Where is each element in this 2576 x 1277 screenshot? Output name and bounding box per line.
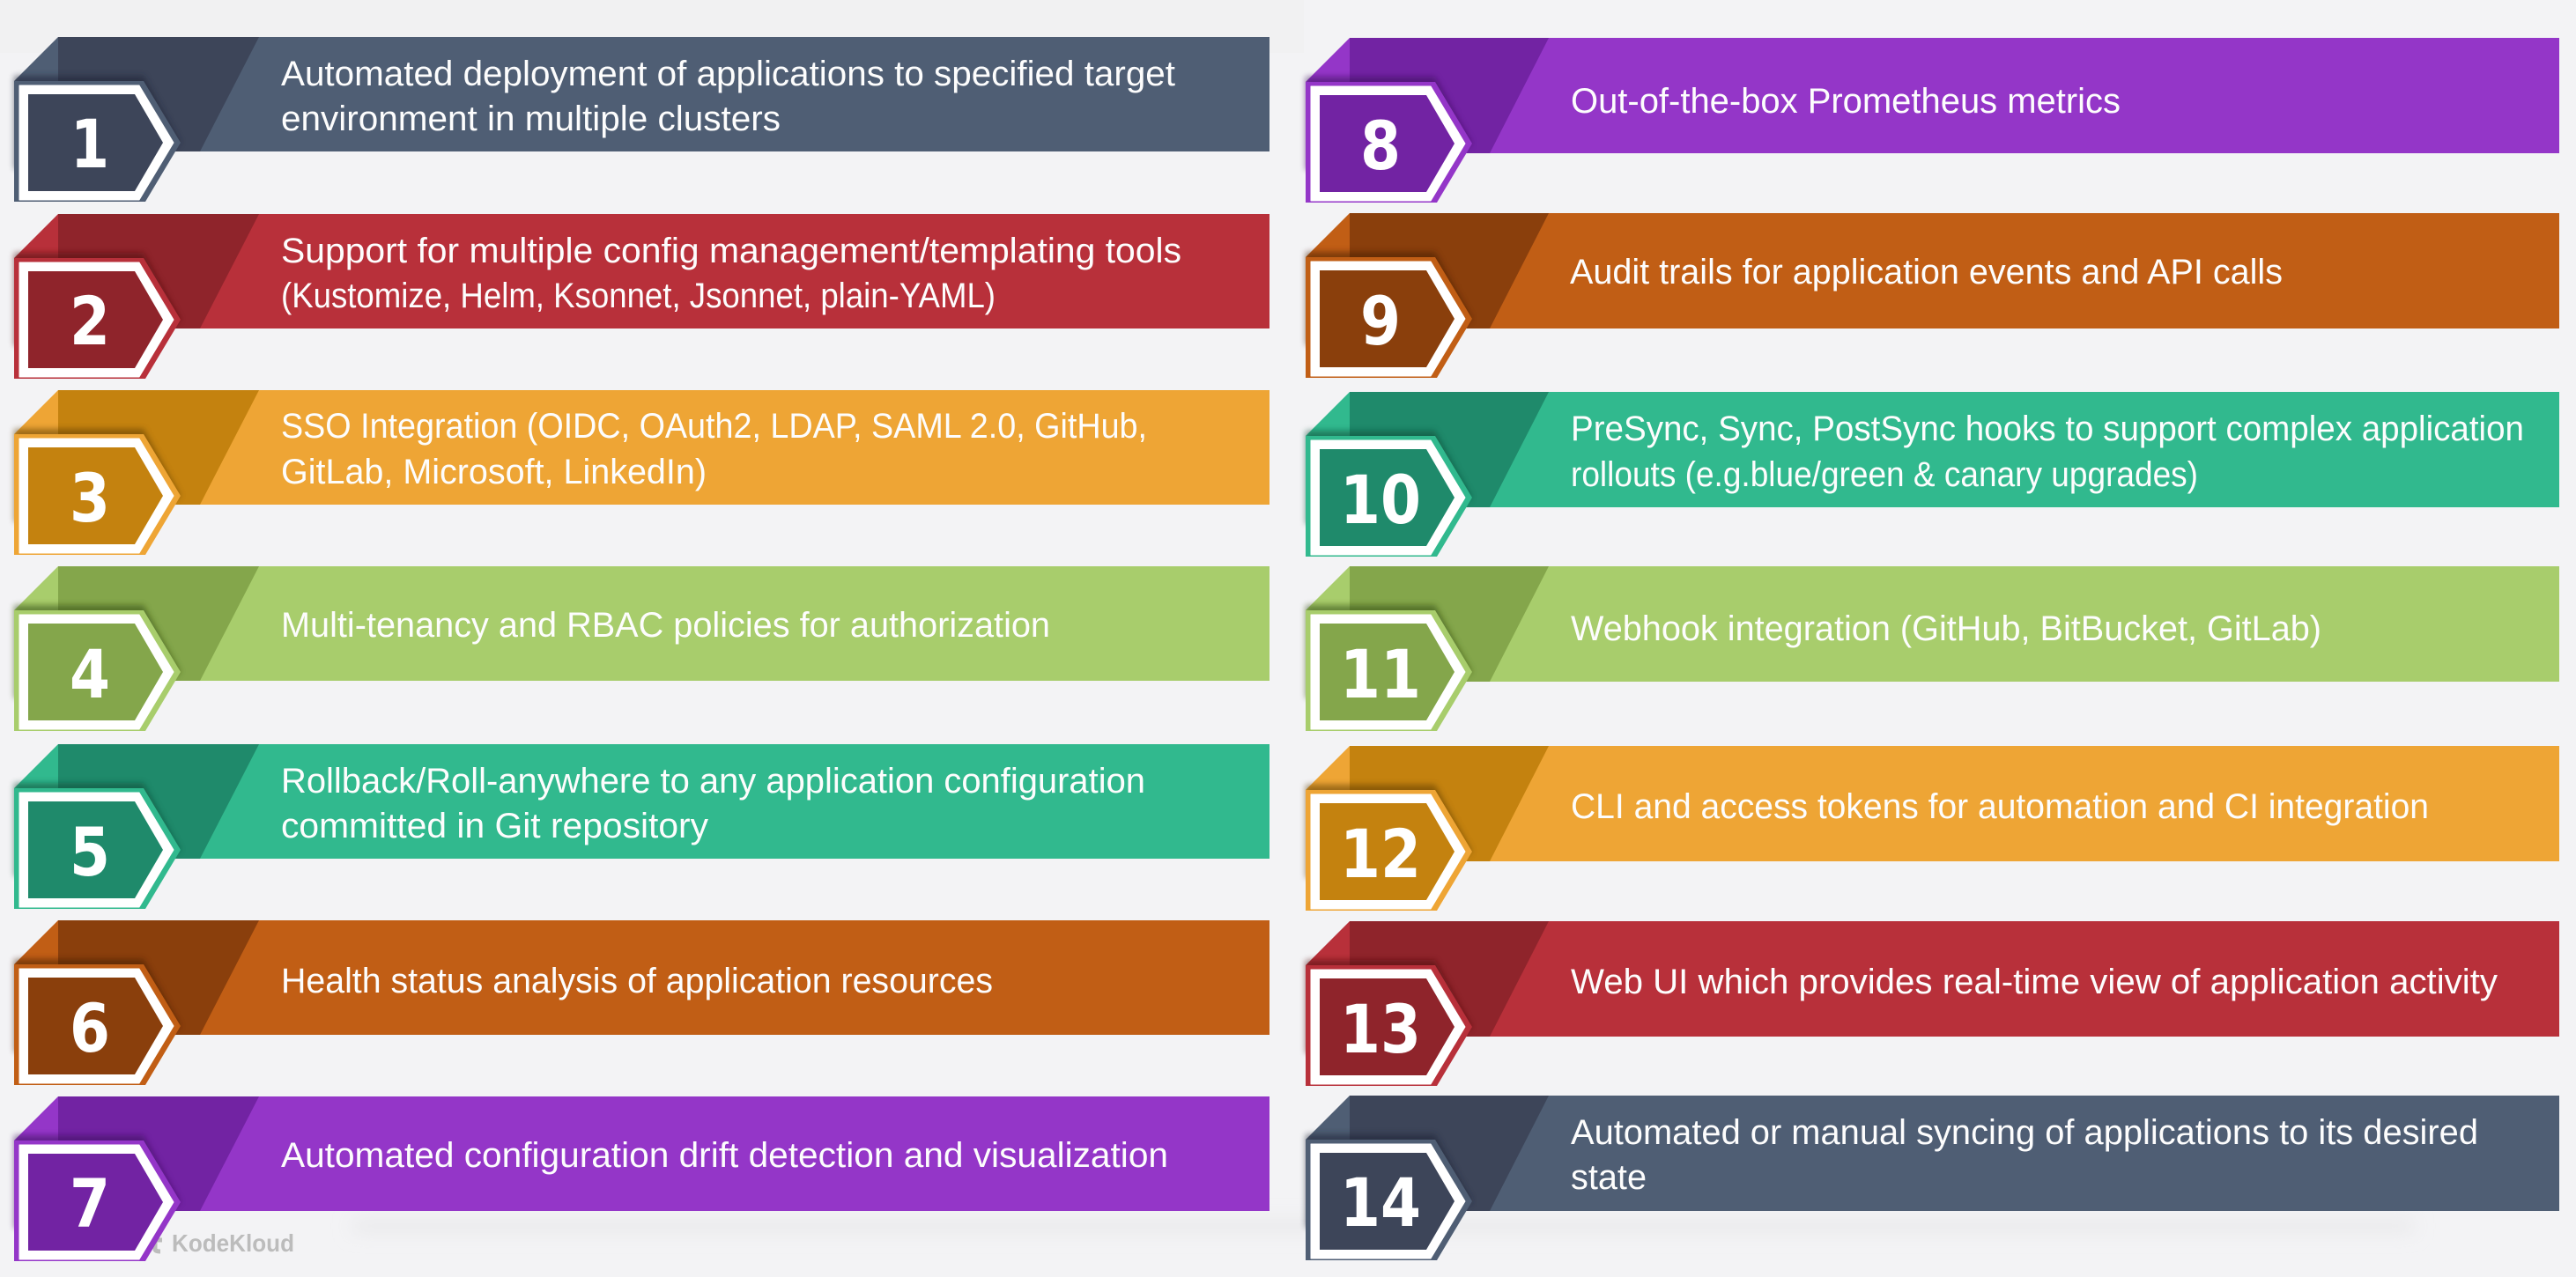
badge shadow [1306,77,1472,170]
badge: 2 [70,282,110,360]
text: committed in Git repository [281,807,708,845]
fold [14,920,58,964]
band dark section [58,744,259,859]
badge [14,1140,181,1261]
fold [14,37,58,81]
fold [1306,38,1350,82]
fold [1306,566,1350,610]
badge [14,258,181,379]
panel: feature 1 [14,37,1269,202]
badge shadow [1306,431,1472,524]
text: SSO Integration (OIDC, OAuth2, LDAP, SAML 2.0, GitHub, [281,407,1147,446]
band [1350,38,2559,153]
badge [1306,790,1472,911]
badge shadow [14,76,181,169]
fold [14,390,58,434]
panel: feature 7 [14,1096,1269,1261]
text: Automated deployment of applications to specified target [281,55,1175,93]
band [58,37,1269,151]
text: (Kustomize, Helm, Ksonnet, Jsonnet, plain-YAML) [281,277,996,315]
panel: feature 4 [14,566,1269,731]
text: state [1571,1158,1647,1197]
badge: 4 [70,635,110,713]
fold [1306,746,1350,790]
panel: feature 3 [14,390,1269,555]
badge [14,81,181,202]
band [1350,921,2559,1037]
band dark section [1350,392,1549,507]
badge shadow [1306,252,1472,345]
text: GitLab, Microsoft, LinkedIn) [281,453,707,491]
badge: 7 [70,1164,110,1243]
band [58,214,1269,328]
badge shadow [1306,960,1472,1053]
badge [14,610,181,731]
badge: 3 [70,459,110,537]
band [1350,566,2559,682]
badge: 10 [1340,461,1421,539]
text: environment in multiple clusters [281,100,781,138]
badge [1306,610,1472,731]
fold [14,214,58,258]
panel: feature 12 [1306,746,2559,911]
badge: 14 [1340,1163,1421,1242]
badge shadow [14,1135,181,1229]
fold [14,1096,58,1140]
badge shadow [14,959,181,1052]
band [1350,1096,2559,1211]
band [58,1096,1269,1211]
band [1350,392,2559,507]
text: Multi-tenancy and RBAC policies for authorization [281,606,1050,645]
badge [14,964,181,1085]
band dark section [1350,1096,1549,1211]
badge [1306,436,1472,557]
panel: feature 11 [1306,566,2559,731]
band dark section [58,566,259,681]
text: rollouts (e.g.blue/green & canary upgrades) [1571,455,2198,494]
text: Automated configuration drift detection and visualization [281,1136,1168,1175]
panel: feature 10 [1306,392,2559,557]
text: Out-of-the-box Prometheus metrics [1571,82,2121,121]
badge: 11 [1340,635,1421,713]
band [58,566,1269,681]
band [58,744,1269,859]
badge: 12 [1340,815,1421,893]
badge shadow [1306,1134,1472,1228]
badge: 8 [1360,107,1401,185]
text: Rollback/Roll-anywhere to any application configuration [281,762,1145,801]
band dark section [58,920,259,1035]
band dark section [1350,213,1549,328]
badge: 13 [1340,990,1421,1068]
panel: feature 2 [14,214,1269,379]
band [58,390,1269,505]
badge: 9 [1360,282,1401,360]
badge [14,788,181,909]
panel: feature 13 [1306,921,2559,1086]
band dark section [58,37,259,151]
badge: 6 [70,989,110,1067]
badge shadow [14,605,181,698]
band dark section [1350,921,1549,1037]
panel: feature 6 [14,920,1269,1085]
text: Webhook integration (GitHub, BitBucket, GitLab) [1571,609,2321,648]
band dark section [1350,38,1549,153]
badge shadow [14,783,181,876]
band dark section [58,1096,259,1211]
badge: 1 [70,105,109,183]
fold [1306,392,1350,436]
text: CLI and access tokens for automation and CI integration [1571,787,2429,826]
text: Automated or manual syncing of applications to its desired [1571,1113,2478,1152]
band [1350,746,2559,861]
band [1350,213,2559,328]
fold [14,566,58,610]
text: Web UI which provides real-time view of application activity [1571,963,2498,1001]
fold [1306,1096,1350,1140]
fold [14,744,58,788]
band dark section [1350,746,1549,861]
panel: feature 5 [14,744,1269,909]
badge [1306,1140,1472,1260]
badge [14,434,181,555]
text: Support for multiple config management/templating tools [281,232,1181,270]
text: Health status analysis of application resources [281,962,993,1000]
badge [1306,965,1472,1086]
badge [1306,82,1472,203]
panel: feature 14 [1306,1096,2559,1260]
band dark section [58,390,259,505]
band [58,920,1269,1035]
band dark section [58,214,259,328]
watermark: KodeKloud: KodeKloud [172,1229,294,1257]
band dark section [1350,566,1549,682]
text: Audit trails for application events and API calls [1570,253,2283,292]
badge: 5 [70,813,110,891]
panel: feature 8 [1306,38,2559,203]
fold [1306,213,1350,257]
fold [1306,921,1350,965]
badge shadow [14,253,181,346]
badge shadow [1306,785,1472,878]
badge shadow [14,429,181,522]
badge [1306,257,1472,378]
panel: feature 9 [1306,213,2559,378]
text: PreSync, Sync, PostSync hooks to support complex application [1571,410,2524,448]
badge shadow [1306,605,1472,698]
